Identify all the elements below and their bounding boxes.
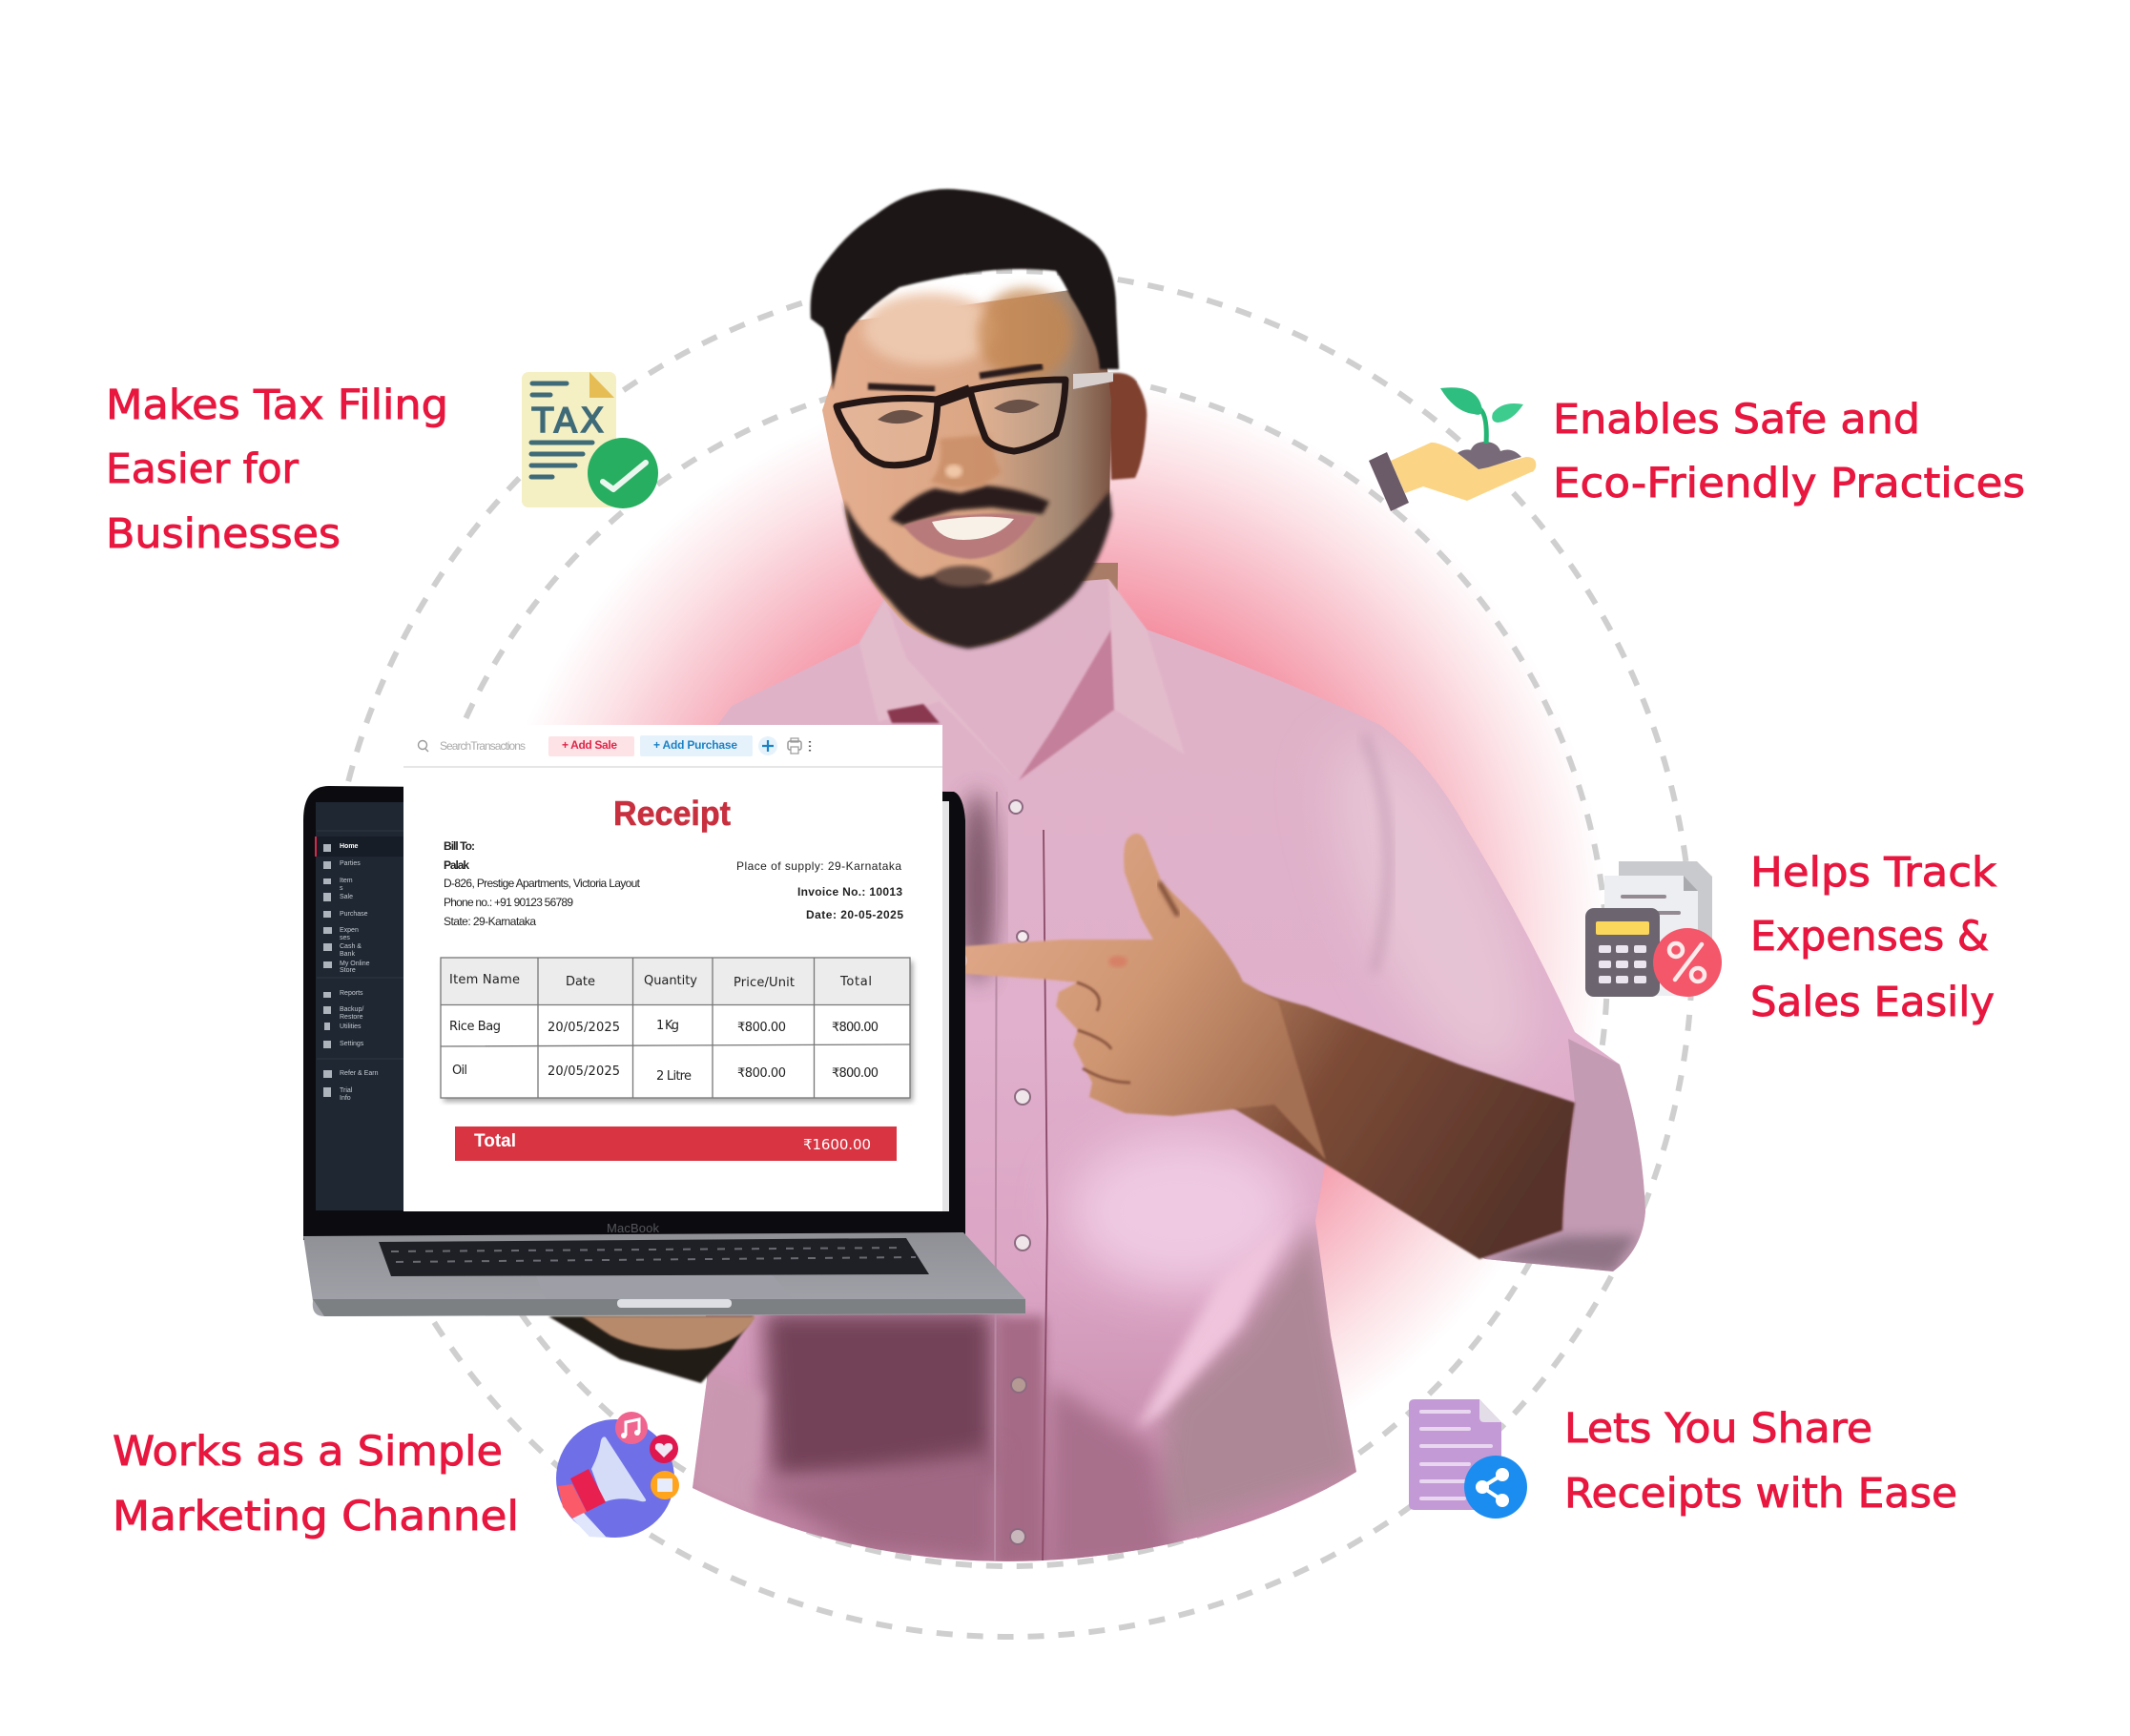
receipt title: Receipt bbox=[613, 794, 731, 833]
teeth bbox=[932, 517, 1014, 540]
icon: megaphone bbox=[556, 1412, 679, 1538]
receipt table: ₹800.00 bbox=[832, 1021, 879, 1035]
bill to details: Phone no.: +91 90123 56789 bbox=[444, 896, 573, 909]
cuff bbox=[1479, 1039, 1645, 1271]
app sidebar: Store bbox=[340, 967, 356, 974]
icon: tax document: TAX bbox=[531, 402, 604, 441]
pink radial glow background bbox=[483, 377, 1608, 1502]
receipt table: Item Name bbox=[449, 973, 520, 987]
receipt table: Rice Bag bbox=[449, 1020, 501, 1034]
benefit: track expenses bbox=[1750, 849, 1996, 1026]
app sidebar: Sale bbox=[340, 894, 353, 900]
right ear bbox=[1106, 373, 1147, 480]
icon: calculator and percent bbox=[1585, 861, 1722, 997]
receipt table: Total bbox=[839, 975, 872, 989]
app sidebar: Backup/ bbox=[340, 1006, 363, 1013]
keyboard bbox=[379, 1238, 929, 1276]
left hand under laptop bbox=[548, 1316, 755, 1383]
nose bbox=[930, 434, 1002, 488]
benefit: tax filing: Makes Tax Filing bbox=[106, 382, 448, 429]
benefit: track expenses: Expenses & bbox=[1750, 913, 1989, 961]
benefit: tax filing: Easier for bbox=[106, 445, 299, 493]
benefit: marketing: Marketing Channel bbox=[113, 1493, 519, 1540]
person bbox=[668, 189, 1679, 1583]
app sidebar: Home bbox=[340, 843, 359, 850]
app sidebar: Settings bbox=[340, 1041, 364, 1047]
brows bbox=[868, 366, 1043, 389]
receipt table: Price/Unit bbox=[734, 976, 795, 990]
app sidebar: Expen bbox=[340, 927, 359, 934]
glasses bbox=[837, 380, 1065, 465]
icon: tax document bbox=[522, 372, 658, 508]
invoice meta: Invoice No.: 10013 bbox=[797, 885, 902, 899]
bill to details: State: 29-Karnataka bbox=[444, 915, 536, 928]
dark under laptop bbox=[763, 1312, 994, 1478]
right side tan bbox=[1154, 1221, 1359, 1536]
app sidebar: Purchase bbox=[340, 911, 368, 918]
laptop bbox=[303, 786, 1025, 1316]
shadow beside laptop bbox=[959, 792, 997, 982]
receipt table: Oil bbox=[452, 1064, 467, 1078]
receipt table: 2 Litre bbox=[656, 1069, 692, 1084]
trackpad bbox=[536, 1275, 792, 1299]
mouth bbox=[903, 513, 1037, 559]
laptop brand: MacBook bbox=[607, 1221, 660, 1235]
benefit: track expenses: Helps Track bbox=[1750, 849, 1996, 897]
laptop base bbox=[303, 1232, 1025, 1316]
benefit: tax filing bbox=[106, 382, 448, 558]
benefit: share receipts bbox=[1564, 1405, 1957, 1518]
receipt table: Date bbox=[566, 975, 595, 989]
total bar: Total bbox=[474, 1131, 516, 1151]
receipt card bbox=[403, 725, 942, 1211]
app sidebar: Restore bbox=[340, 1014, 363, 1021]
benefit: track expenses: Sales Easily bbox=[1750, 979, 1995, 1026]
receipt table bbox=[441, 958, 910, 1098]
benefit: marketing: Works as a Simple bbox=[113, 1428, 503, 1476]
app sidebar: Item bbox=[340, 878, 353, 884]
icon: hand holding seedling bbox=[1369, 387, 1536, 511]
app sidebar: Bank bbox=[340, 951, 355, 958]
invoice meta: Date: 20-05-2025 bbox=[806, 908, 903, 921]
invoice meta: Place of supply: 29-Karnataka bbox=[736, 859, 901, 873]
placket line bbox=[1043, 830, 1047, 1564]
benefit: eco friendly: Enables Safe and bbox=[1553, 396, 1920, 444]
moustache bbox=[890, 486, 1049, 526]
forehead highlight bbox=[863, 293, 997, 365]
receipt table: ₹800.00 bbox=[832, 1066, 879, 1081]
dashed outer ring bbox=[326, 271, 1692, 1637]
app sidebar: Trial bbox=[340, 1087, 353, 1094]
app sidebar: Reports bbox=[340, 990, 363, 997]
receipt table: ₹800.00 bbox=[737, 1066, 786, 1081]
app sidebar: s bbox=[340, 885, 343, 892]
app sidebar: ses bbox=[340, 935, 350, 941]
glasses temple arm bbox=[1073, 372, 1113, 389]
benefit: eco friendly: Eco-Friendly Practices bbox=[1553, 460, 2025, 507]
receipt table: 20/05/2025 bbox=[548, 1021, 620, 1035]
shirt bbox=[668, 572, 1679, 1583]
light folds bbox=[1068, 1135, 1297, 1288]
screen right strip bbox=[940, 801, 949, 1211]
bill to details: Palak bbox=[444, 858, 469, 872]
neck bbox=[878, 563, 1118, 792]
app sidebar: Cash & bbox=[340, 943, 362, 950]
laptop notch bbox=[617, 1299, 732, 1308]
bill to details bbox=[444, 839, 641, 928]
app sidebar: Info bbox=[340, 1095, 351, 1102]
dashed inner ring bbox=[411, 370, 1607, 1566]
bill to details: Bill To: bbox=[444, 839, 475, 853]
eyes bbox=[878, 410, 923, 424]
total bar: ₹1600.00 bbox=[803, 1136, 871, 1153]
bill to details: D-826, Prestige Apartments, Victoria Layout bbox=[444, 877, 641, 890]
app sidebar: Parties bbox=[340, 860, 361, 867]
app sidebar: Utilities bbox=[340, 1023, 362, 1030]
receipt table: 1 Kg bbox=[656, 1019, 679, 1033]
app sidebar: Refer & Earn bbox=[340, 1070, 379, 1077]
toolbar: + Add Sale bbox=[562, 738, 617, 752]
benefit: share receipts: Lets You Share bbox=[1564, 1405, 1872, 1453]
laptop lid bbox=[303, 786, 965, 1240]
receipt table: 20/05/2025 bbox=[548, 1064, 620, 1079]
total bar bbox=[455, 1126, 897, 1161]
benefit: share receipts: Receipts with Ease bbox=[1564, 1470, 1957, 1518]
face bbox=[822, 286, 1111, 645]
soul patch bbox=[935, 566, 992, 587]
shirt buttons bbox=[1009, 800, 1030, 1544]
receipt table: ₹800.00 bbox=[737, 1021, 786, 1035]
toolbar bbox=[403, 735, 942, 767]
forearm bbox=[1230, 992, 1575, 1259]
collar bbox=[859, 579, 1185, 782]
receipt table: Quantity bbox=[644, 974, 697, 988]
toolbar: + Add Purchase bbox=[653, 738, 737, 752]
benefit: eco friendly bbox=[1553, 396, 2025, 507]
app sidebar: My Online bbox=[340, 961, 370, 967]
pointing hand bbox=[946, 834, 1326, 1160]
toolbar: SearchTransactions bbox=[440, 739, 526, 753]
invoice meta bbox=[736, 859, 903, 921]
beard bbox=[844, 491, 1112, 649]
app sidebar bbox=[315, 802, 404, 1210]
head bbox=[811, 189, 1147, 649]
benefit: marketing bbox=[113, 1428, 519, 1540]
benefit: tax filing: Businesses bbox=[106, 510, 341, 558]
icon: shared document bbox=[1409, 1399, 1527, 1519]
hair bbox=[811, 189, 1119, 390]
